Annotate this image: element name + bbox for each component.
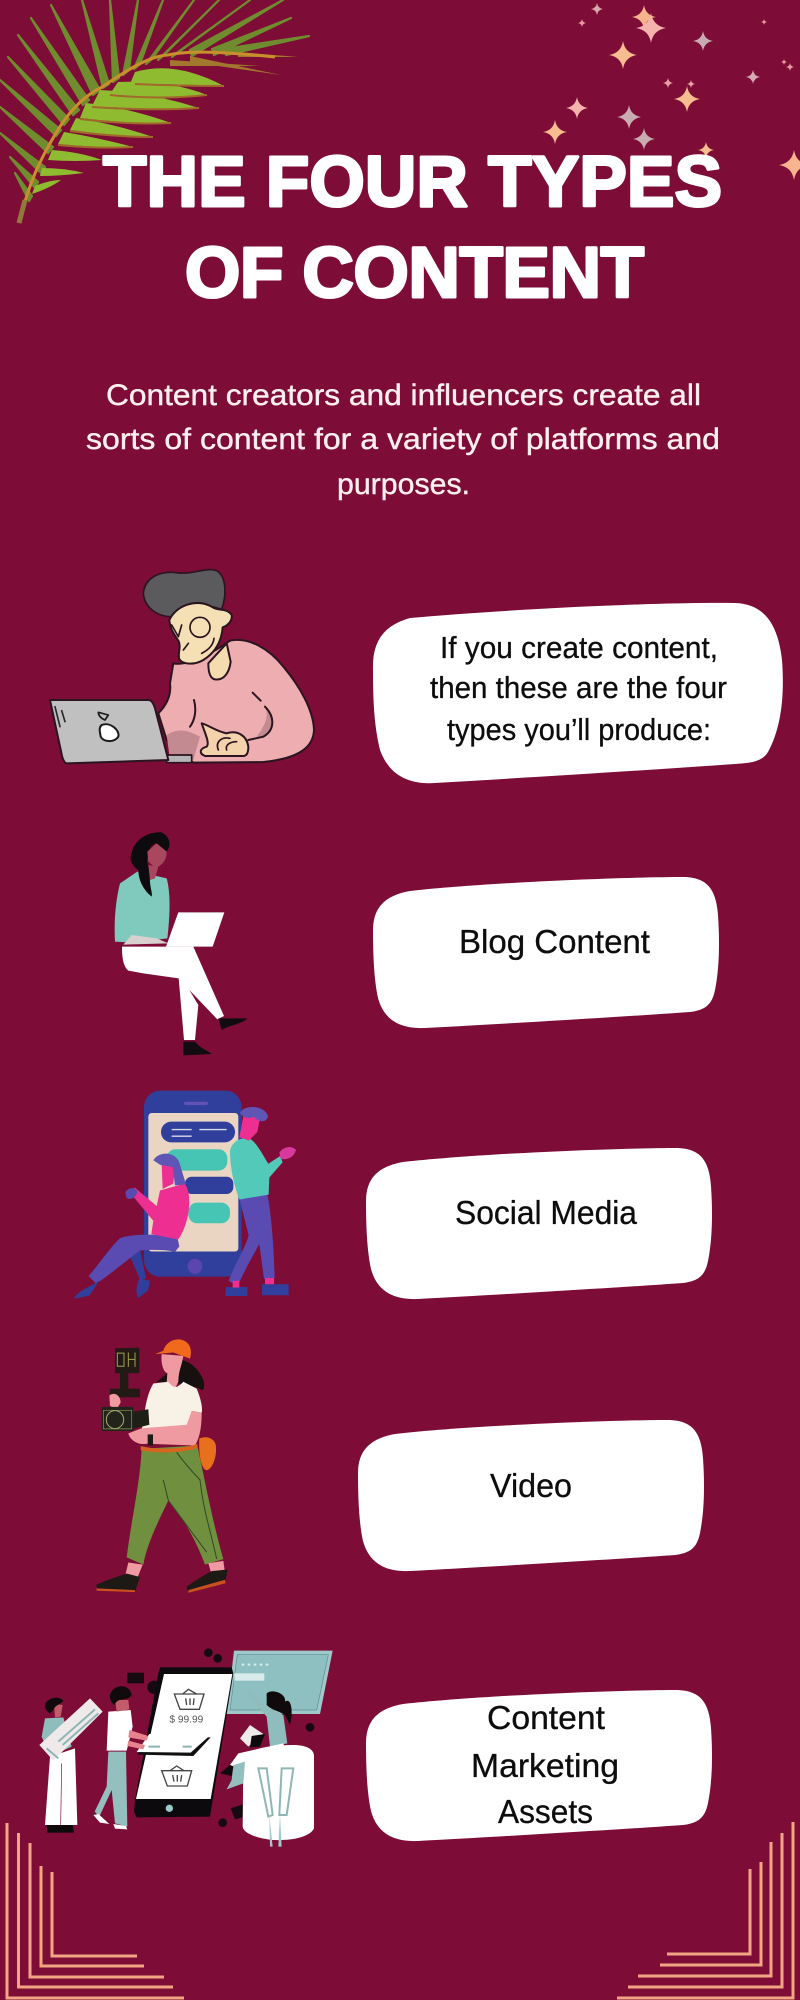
speech bubble: social media [366,1148,712,1299]
shoes [183,1018,247,1055]
laptop base [167,755,192,763]
neck [208,643,231,679]
body creases [190,693,272,740]
illustration: person with laptop [50,570,314,763]
chat bubbles [161,1122,235,1223]
speech bubble: video [358,1420,704,1571]
seated woman on drum [220,1691,314,1847]
title: THE FOUR TYPES [103,143,722,222]
trousers [127,1445,223,1565]
camera [102,1407,149,1431]
corner lines: bottom right [617,1822,793,1998]
illustration: ecommerce team [39,1648,333,1847]
icon: palm leaf [0,0,309,223]
speech bubble: content marketing assets: Content [487,1699,605,1736]
ankles [125,1561,225,1578]
face and neck [161,1354,183,1389]
speech bubble: blog content [373,877,719,1028]
speech bubble: intro: types you’ll produce: [447,712,711,747]
phone screen [136,1674,232,1799]
hands [123,935,168,945]
monitor [110,1348,140,1397]
person with document [39,1698,103,1833]
phone [144,1091,242,1277]
intro text: sorts of content for a variety of platforms and [86,423,720,456]
hair [131,832,169,897]
neck [148,865,158,880]
home button [188,1259,202,1274]
illustration: two people with phone [74,1091,296,1299]
arm holding camera [109,1394,121,1409]
illustration: videographer [96,1339,228,1593]
woman [74,1154,189,1299]
shoes [96,1569,228,1593]
screen [148,1113,238,1252]
review screen [227,1651,333,1714]
face [147,843,167,867]
glasses and smile [172,617,214,653]
speech bubble: content marketing assets [366,1690,712,1841]
bag [199,1437,216,1470]
body [158,640,314,763]
speech bubble: content marketing assets: Assets [498,1793,593,1830]
speech bubble: social media: Social Media [455,1194,638,1231]
body shading [167,703,272,760]
icon: sparkles [543,3,800,180]
speech bubble: video: Video [490,1467,572,1504]
face [169,603,232,664]
trousers [122,947,224,1040]
shirt [115,872,170,943]
intro text: purposes. [337,468,470,501]
speech bubble: intro: If you create content, [440,630,718,665]
person with card [93,1686,148,1829]
decorative dots [127,1648,314,1827]
arms [128,1411,202,1445]
man [225,1107,296,1296]
laptop [50,700,168,763]
basket bottom [162,1766,192,1786]
shirt [142,1382,202,1435]
hair [143,570,225,617]
corner lines: bottom left [7,1823,184,1998]
speech bubble: intro: then these are the four [430,670,727,705]
hair [157,1359,204,1390]
laptop [166,912,224,947]
price: $ 99.99 [169,1715,204,1726]
speech bubble: content marketing assets: Marketing [471,1747,619,1784]
hat [155,1339,191,1359]
fingers [217,738,237,750]
belt [141,1444,197,1452]
title: OF CONTENT [185,234,644,313]
phone [134,1667,233,1817]
hand [201,723,248,756]
intro text [86,379,720,501]
speech bubble: blog content: Blog Content [459,923,650,960]
intro text: Content creators and influencers create all [106,379,701,412]
basket top [174,1689,204,1709]
laptop logo [100,724,119,741]
credit card [137,1734,211,1756]
illustration: woman with laptop [115,832,247,1055]
title [103,143,722,313]
speech bubble: intro [373,603,783,783]
